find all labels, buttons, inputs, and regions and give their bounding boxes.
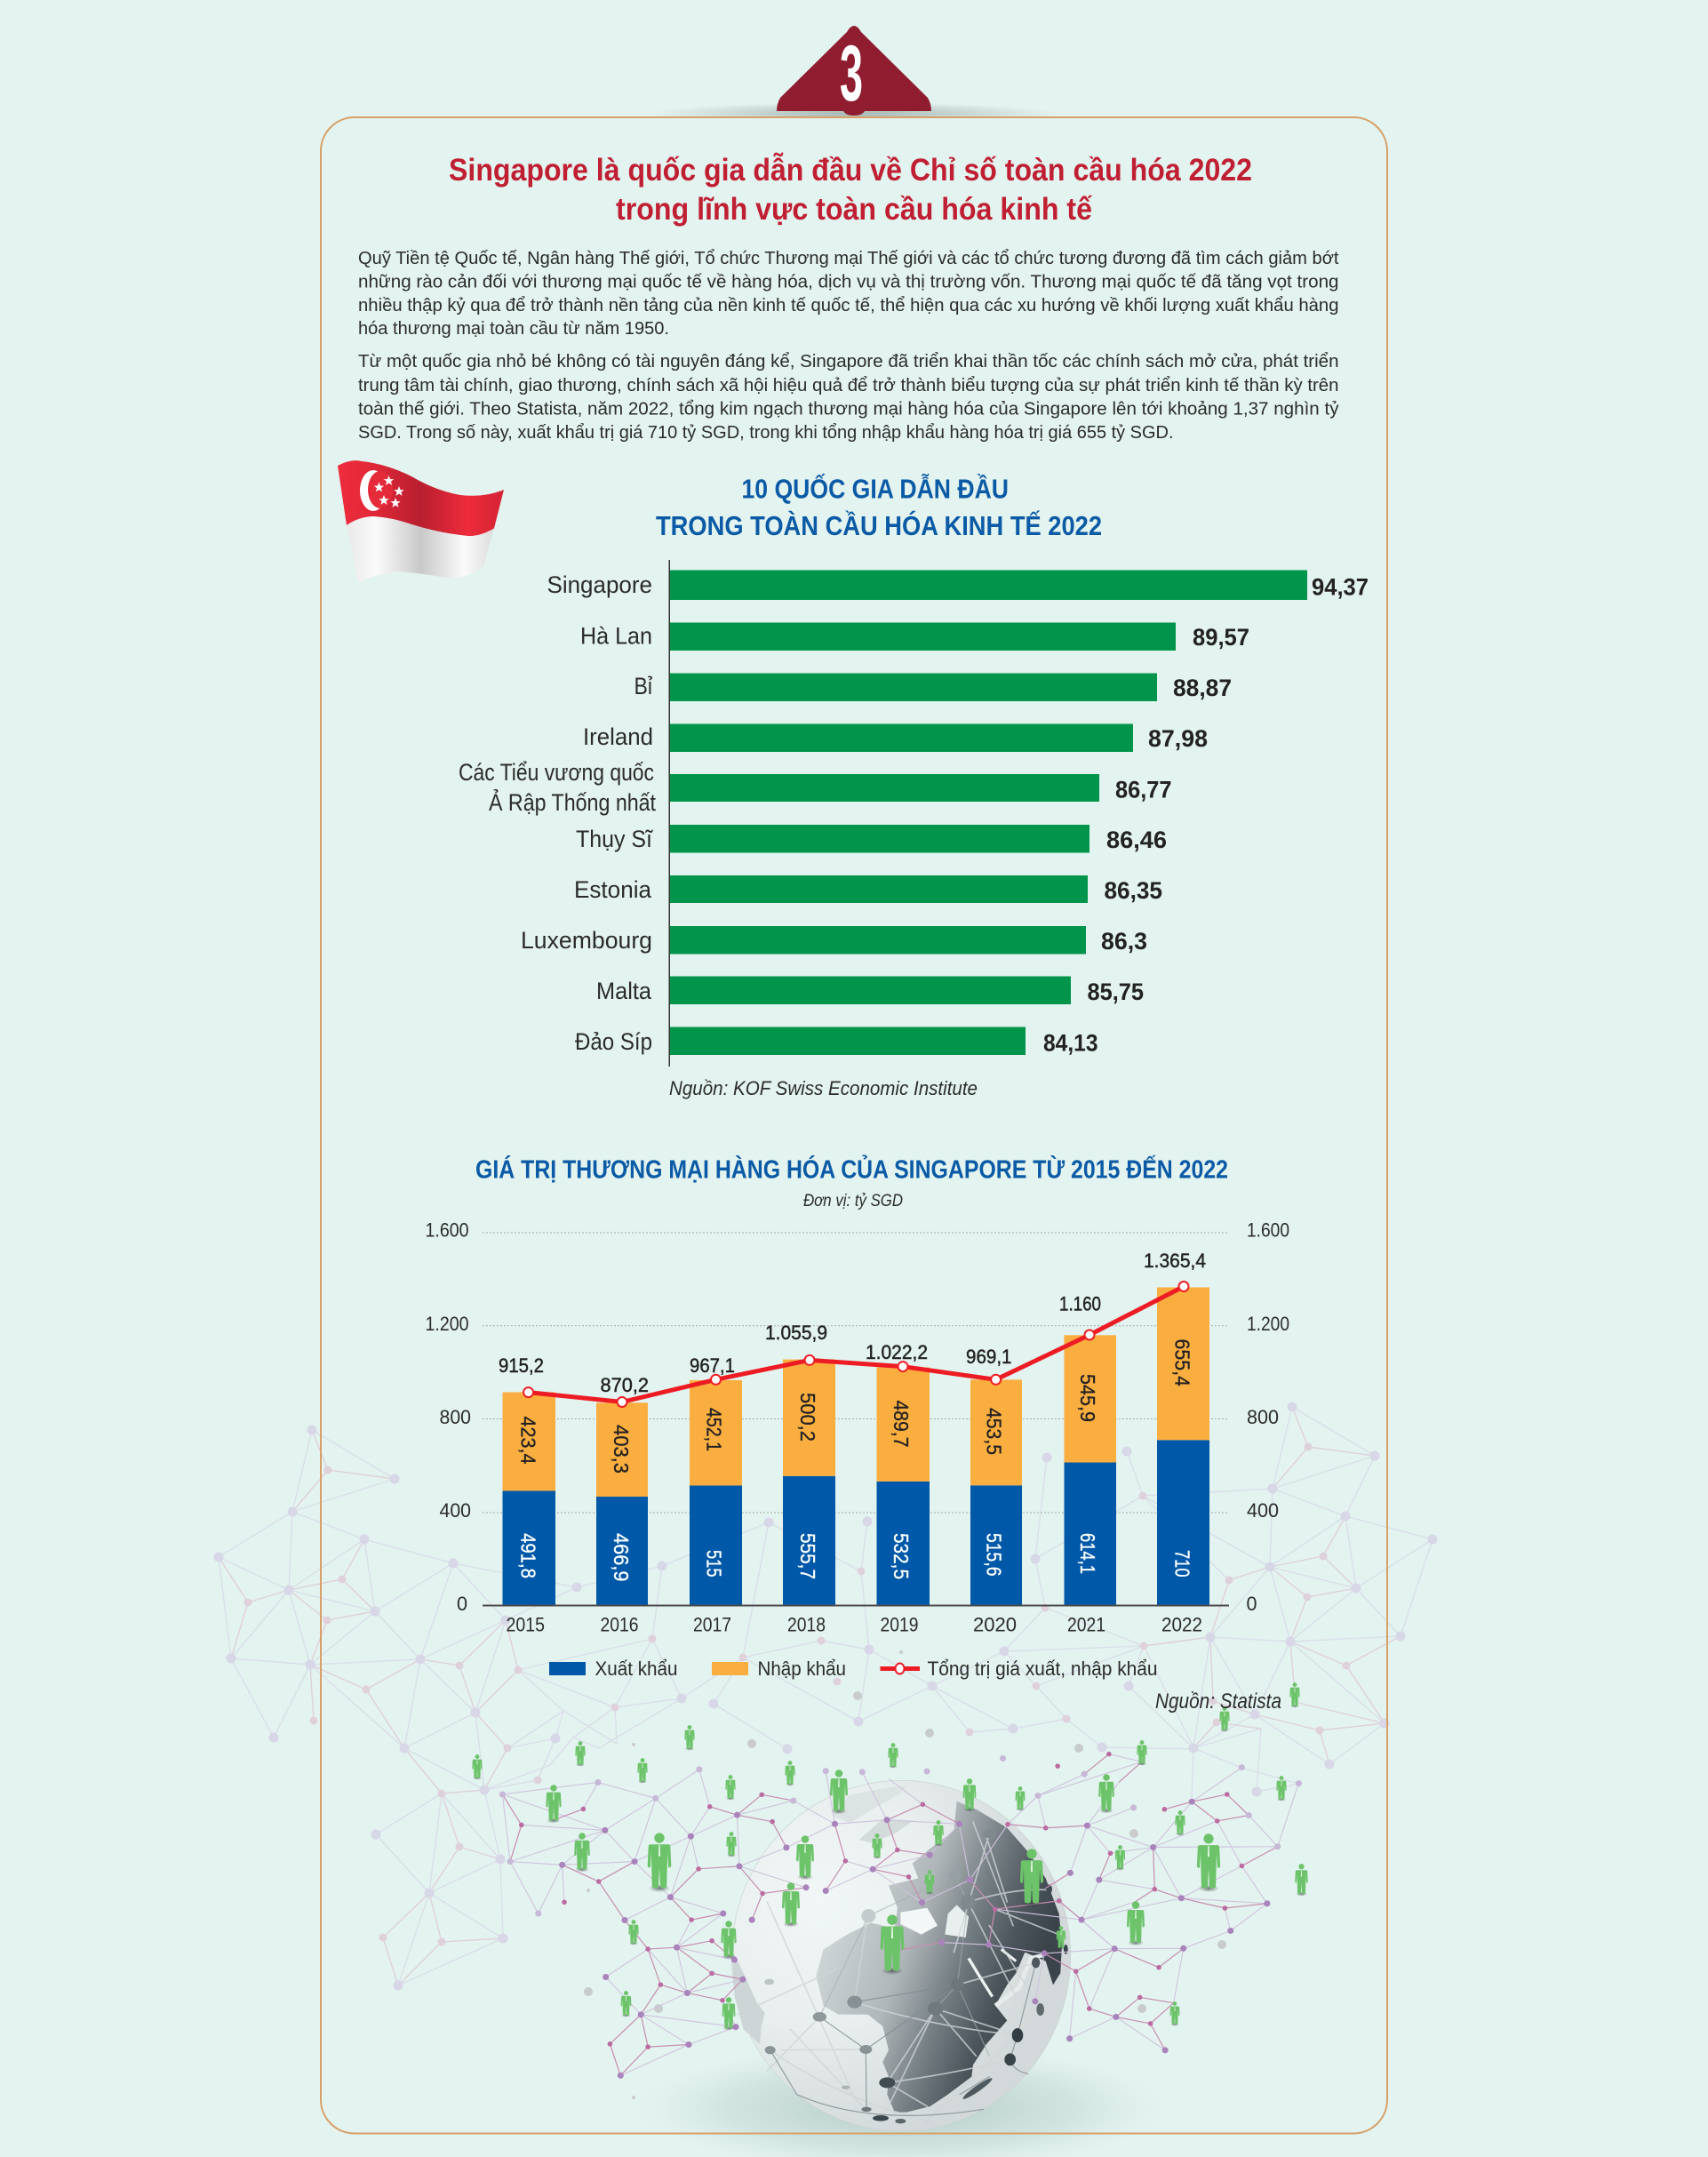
- network: lavender links: [502, 1754, 1298, 2075]
- year labels: 2020: [973, 1614, 1017, 1635]
- intro paragraph 1: [358, 248, 1339, 339]
- export values: 515,6: [983, 1533, 1006, 1577]
- total values: 969,1: [966, 1346, 1011, 1368]
- intro paragraph 1: nhiều thập kỷ qua để trở thành nền tảng của nền kinh tế quốc tế, thể hiện qua các xu hướng về khối lượng xuất khẩu hàng: [358, 295, 1338, 316]
- intro paragraph 2: Từ một quốc gia nhỏ bé không có tài nguyên đáng kể, Singapore đã triển khai thần tốc các chính sách mở cửa, phát triển: [358, 351, 1338, 371]
- network: light outer nodes: [502, 1759, 1298, 1913]
- number badge: [777, 26, 931, 117]
- heading: top 10 countries: TRONG TOÀN CẦU HÓA KINH TẾ 2022: [656, 509, 1102, 541]
- heading: trade value: GIÁ TRỊ THƯƠNG MẠI HÀNG HÓA CỦA SINGAPORE TỪ 2015 ĐẾN 2022: [475, 1154, 1228, 1184]
- year labels: 2016: [601, 1614, 638, 1635]
- import values: 655,4: [1171, 1338, 1194, 1386]
- bar: Singapore: [547, 571, 1369, 601]
- stacked bar chart: trade value: [425, 1219, 1289, 1635]
- export values: 466,9: [610, 1533, 633, 1582]
- network: magenta links: [502, 1754, 1278, 2075]
- left axis labels: 1.600: [425, 1219, 469, 1241]
- left axis labels: [425, 1219, 471, 1615]
- source: Statista: Nguồn: Statista: [1155, 1690, 1281, 1714]
- export values: 532,5: [890, 1533, 913, 1579]
- total values: 1.055,9: [765, 1322, 827, 1344]
- legend: Tổng trị giá xuất, nhập khẩu: [928, 1658, 1157, 1680]
- bar chart: globalization index: [459, 560, 1369, 1067]
- badge shadow: [622, 102, 1084, 128]
- icon: Singapore flag: [338, 460, 504, 583]
- purple network around globe: [502, 1754, 1298, 2075]
- bar: Bỉ: [635, 673, 1232, 701]
- globe shadow: [635, 2044, 1168, 2157]
- title: trong lĩnh vực toàn cầu hóa kinh tế: [616, 192, 1092, 227]
- left axis labels: 800: [439, 1406, 471, 1428]
- bar: Estonia: [574, 875, 1162, 904]
- total values: 1.022,2: [866, 1341, 928, 1363]
- right axis labels: 400: [1247, 1499, 1279, 1522]
- export values: 710: [1171, 1550, 1194, 1578]
- title: Singapore là quốc gia dẫn đầu về Chỉ số toàn cầu hóa 2022: [449, 152, 1252, 188]
- continents: [731, 1785, 1062, 2113]
- year labels: 2019: [880, 1614, 919, 1635]
- export values: [517, 1533, 1194, 1582]
- import values: 500,2: [796, 1393, 819, 1442]
- year labels: 2021: [1067, 1614, 1105, 1635]
- bar: Thụy Sĩ: Thụy Sĩ: [576, 826, 653, 852]
- bar: Bỉ: Bỉ: [635, 673, 652, 699]
- bar: Singapore: Singapore: [547, 571, 652, 598]
- network: purple nodes: [563, 1801, 1267, 2075]
- icon: globe: [731, 1780, 1071, 2131]
- source: KOF: Nguồn: KOF Swiss Economic Institute: [669, 1077, 978, 1099]
- bar: Luxembourg: [521, 926, 1147, 955]
- bar: Ireland: [583, 723, 1208, 752]
- intro paragraph 1: những rào cản đối với thương mại quốc tế về hàng hóa, dịch vụ và thị trường vốn. Thương mại quốc tế đã tăng vọt trong: [358, 272, 1338, 292]
- total values: 967,1: [690, 1354, 735, 1377]
- legend: Nhập khẩu: [757, 1658, 846, 1680]
- year labels: [507, 1614, 1202, 1635]
- bar: Thụy Sĩ: 86,46: [1106, 827, 1167, 853]
- bar: Các Tiểu vương quốc Ả Rập Thống nhất: Ả Rập Thống nhất: [489, 787, 656, 816]
- import values: 403,3: [610, 1425, 633, 1474]
- import values: 423,4: [517, 1417, 540, 1465]
- total values: [499, 1250, 1206, 1396]
- bar: Malta: [596, 976, 1144, 1005]
- bar: Singapore: 94,37: [1312, 574, 1369, 601]
- right axis labels: [1246, 1219, 1289, 1615]
- axis baseline: [483, 1605, 1229, 1607]
- icons: people: [472, 1682, 1308, 2030]
- total values: 1.365,4: [1144, 1250, 1206, 1272]
- legend: [549, 1658, 1157, 1680]
- left axis labels: 1.200: [425, 1313, 469, 1335]
- bar: Các Tiểu vương quốc Ả Rập Thống nhất: 86,77: [1115, 777, 1171, 803]
- bars: export: [503, 1440, 1209, 1605]
- import values: 545,9: [1076, 1374, 1099, 1422]
- bar: Ireland: Ireland: [583, 723, 653, 750]
- intro paragraph 1: Quỹ Tiền tệ Quốc tế, Ngân hàng Thế giới, Tổ chức Thương mại Thế giới và các tổ chức tương đương đã tìm cách giảm bớt: [358, 248, 1339, 268]
- total line: [523, 1282, 1189, 1407]
- right axis labels: 800: [1247, 1406, 1279, 1428]
- year labels: 2017: [693, 1614, 731, 1635]
- bar: Hà Lan: [580, 622, 1249, 651]
- bar: Các Tiểu vương quốc Ả Rập Thống nhất: Các Tiểu vương quốc: [459, 759, 654, 786]
- export values: 614,1: [1076, 1533, 1099, 1574]
- export values: 515: [702, 1550, 725, 1578]
- bar: Hà Lan: 89,57: [1193, 624, 1249, 651]
- left axis labels: 400: [439, 1499, 471, 1522]
- globe network lines: [738, 1822, 1066, 2124]
- export values: 491,8: [517, 1533, 540, 1578]
- globe nodes: [764, 1829, 1068, 2123]
- intro paragraph 2: SGD. Trong số này, xuất khẩu trị giá 710 tỷ SGD, trong khi tổng nhập khẩu hàng hóa trị giá 655 tỷ SGD.: [358, 422, 1173, 443]
- chart unit: Đơn vị: tỷ SGD: [803, 1192, 903, 1210]
- network: magenta nodes: [522, 1754, 1241, 2047]
- axis line: [668, 560, 670, 1067]
- bar: Bỉ: 88,87: [1173, 675, 1232, 701]
- import values: 453,5: [983, 1408, 1006, 1455]
- total values: 870,2: [601, 1374, 649, 1396]
- grid lines: [483, 1233, 1229, 1513]
- left axis labels: 0: [457, 1593, 467, 1615]
- total values: 1.160: [1059, 1292, 1101, 1315]
- bar: Ireland: 87,98: [1148, 725, 1208, 752]
- bar: Các Tiểu vương quốc Ả Rập Thống nhất: [459, 759, 1171, 816]
- pale network background: [219, 1407, 1433, 2097]
- bar: Đảo Síp: [575, 1027, 1098, 1056]
- import values: [517, 1338, 1194, 1474]
- bar: Malta: Malta: [596, 978, 652, 1004]
- intro paragraph 2: [358, 351, 1339, 443]
- import values: 489,7: [890, 1401, 913, 1447]
- number badge: 3: [840, 28, 863, 117]
- bar: Hà Lan: Hà Lan: [580, 622, 652, 649]
- year labels: 2015: [507, 1614, 545, 1635]
- bar: Luxembourg: Luxembourg: [521, 927, 652, 954]
- right axis labels: 0: [1246, 1593, 1257, 1615]
- intro paragraph 1: hóa thương mại toàn cầu từ năm 1950.: [358, 318, 669, 339]
- bar: Đảo Síp: 84,13: [1043, 1029, 1098, 1056]
- right axis labels: 1.200: [1247, 1313, 1289, 1335]
- year labels: 2018: [787, 1614, 826, 1635]
- export values: 555,7: [796, 1533, 819, 1579]
- intro paragraph 2: trung tâm tài chính, giao thương, chính sách xã hội hiệu quả để trở thành biểu tượng của sự phát triển kinh tế thần kỳ trên: [358, 375, 1338, 395]
- bar: Estonia: 86,35: [1104, 877, 1162, 904]
- right axis labels: 1.600: [1247, 1219, 1289, 1241]
- heading: top 10 countries: [656, 473, 1102, 541]
- bars: import: [503, 1287, 1209, 1497]
- bar: Estonia: Estonia: [574, 876, 652, 903]
- bar: Malta: 85,75: [1088, 979, 1144, 1005]
- title: [449, 152, 1252, 227]
- bar: Luxembourg: 86,3: [1101, 928, 1147, 955]
- import values: 452,1: [702, 1408, 725, 1451]
- panel border: [321, 117, 1387, 2133]
- bar: Đảo Síp: Đảo Síp: [575, 1028, 652, 1055]
- intro paragraph 2: toàn thế giới. Theo Statista, năm 2022, tổng kim ngạch thương mại hàng hóa của Singapore lên tới khoảng 1,37 nghìn tỷ: [358, 398, 1339, 419]
- total values: 915,2: [499, 1354, 544, 1377]
- year labels: 2022: [1161, 1614, 1202, 1635]
- bar: Thụy Sĩ: [576, 825, 1167, 853]
- legend: Xuất khẩu: [595, 1658, 677, 1680]
- heading: top 10 countries: 10 QUỐC GIA DẪN ĐẦU: [741, 473, 1009, 505]
